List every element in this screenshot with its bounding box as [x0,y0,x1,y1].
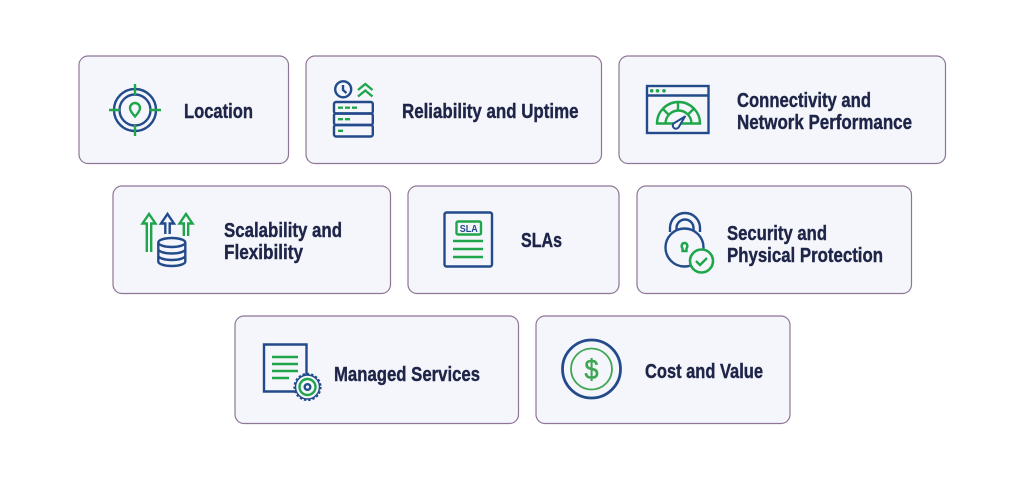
label: Location: Location [184,101,253,123]
panel: Cost and Value [536,316,790,424]
icon: dollar coin [562,340,620,398]
label: Connectivity and Network Performance: Connectivity and [737,90,871,112]
label: Scalability and Flexibility: Flexibility [224,242,304,264]
label: SLAs: SLAs [521,230,562,252]
label: Security and Physical Protection [727,223,883,267]
label: Security and Physical Protection: Physical Protection [727,245,883,267]
label: Reliability and Uptime: Reliability and Uptime [402,101,578,123]
icon: server with clock [334,81,373,136]
icon: SLA document [444,212,492,266]
label: Scalability and Flexibility: Scalability and [224,220,342,242]
panel: Managed Services [235,316,518,424]
label: Connectivity and Network Performance [737,90,912,134]
icon: SLA document: SLA [460,223,478,235]
label: Scalability and Flexibility [224,220,342,264]
panel: Security and Physical Protection [637,186,912,294]
icon: padlock with check [666,213,713,272]
label: Security and Physical Protection: Security and [727,223,827,245]
icon: document with gear [264,344,320,400]
panel: SLAs [408,186,619,294]
label: Cost and Value: Cost and Value [645,361,763,383]
panel: Scalability and Flexibility [113,186,390,294]
icon: dollar coin: $ [584,354,599,385]
label: Managed Services: Managed Services [334,364,480,386]
panel: Location [79,56,288,164]
panel: Reliability and Uptime [306,56,602,164]
icon: browser with gauge [647,86,708,133]
panel: Connectivity and Network Performance [619,56,946,164]
icon: database with arrows [142,214,192,266]
icon: location target [109,84,161,136]
label: Connectivity and Network Performance: Network Performance [737,112,912,134]
